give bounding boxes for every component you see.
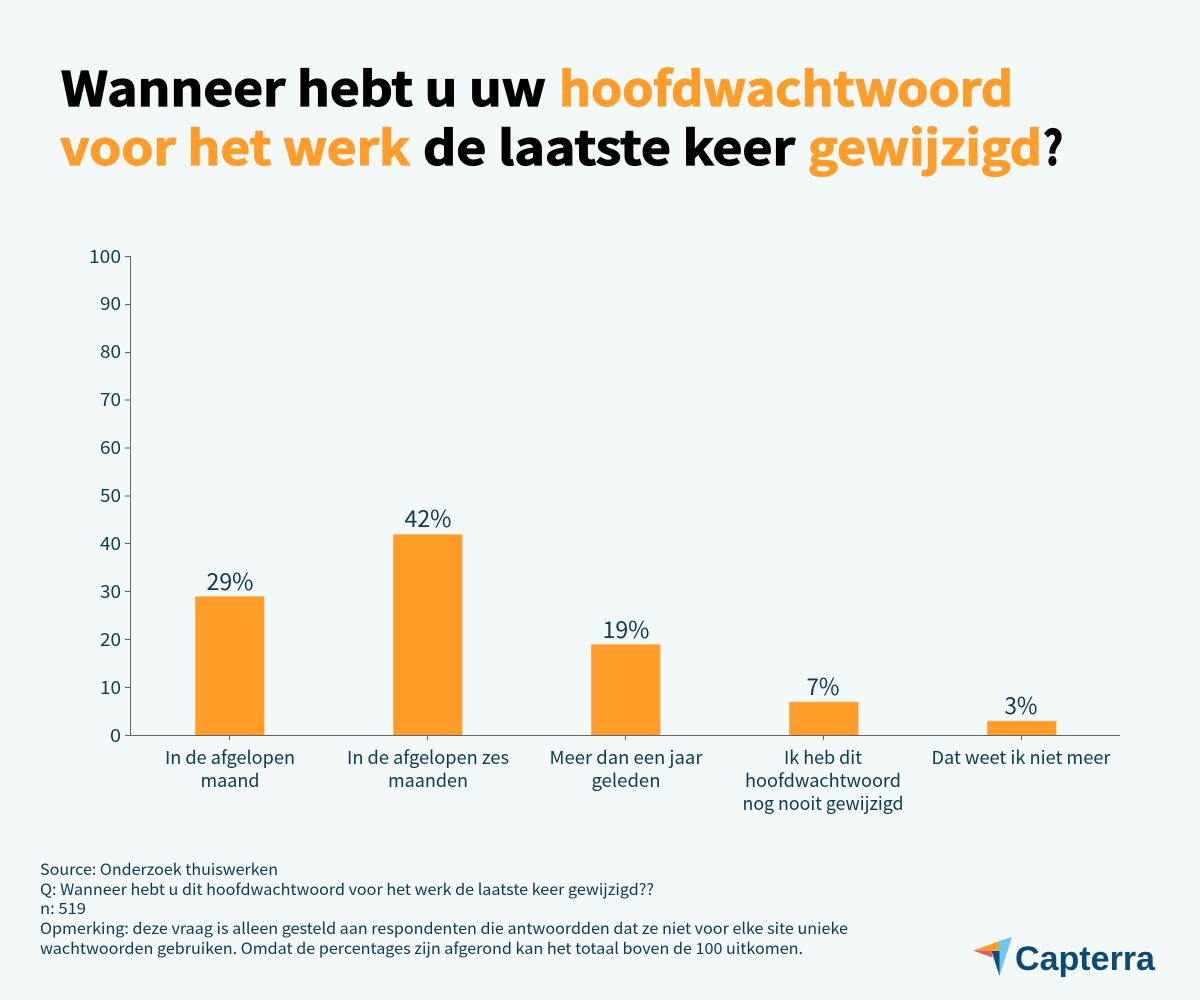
y axis: 40	[100, 530, 121, 556]
y axis: 60	[100, 434, 121, 460]
title: Wanneer hebt u uw	[61, 51, 546, 120]
category labels: Ik heb dit	[784, 744, 862, 770]
category labels: maand	[200, 767, 260, 793]
value labels: 42%	[404, 500, 452, 534]
y axis: 20	[100, 626, 121, 652]
x axis	[130, 736, 1120, 740]
source notes: Opmerking: deze vraag is alleen gesteld aan respondenten die antwoordden dat ze niet voor elke site unieke	[40, 917, 848, 939]
y axis: 100	[89, 243, 121, 269]
source notes: wachtwoorden gebruiken. Omdat de percentages zijn afgerond kan het totaal boven de 100 uitkomen.	[40, 937, 803, 959]
category labels	[165, 744, 1112, 816]
bars	[195, 534, 1056, 736]
source notes: Source: Onderzoek thuiswerken	[40, 858, 278, 880]
category labels: Dat weet ik niet meer	[932, 744, 1112, 770]
title: voor het werk	[60, 110, 411, 179]
category labels: maanden	[388, 767, 468, 793]
title: de laatste keer	[423, 110, 796, 179]
title: gewijzigd	[808, 110, 1042, 179]
title	[60, 51, 1063, 179]
value labels: 3%	[1004, 687, 1038, 721]
y axis: 0	[110, 722, 121, 748]
category labels: nog nooit gewijzigd	[742, 790, 904, 816]
title: hoofdwachtwoord	[559, 51, 1013, 120]
category labels: hoofdwachtwoord	[745, 767, 901, 793]
y axis: 50	[100, 482, 121, 508]
bar chart	[89, 243, 1120, 816]
y axis: 30	[100, 578, 121, 604]
y axis	[89, 243, 130, 748]
logo wordmark: Capterra	[1015, 940, 1156, 978]
logo: Capterra	[973, 937, 1156, 978]
y axis: 80	[100, 338, 121, 364]
category labels: Meer dan een jaar	[550, 744, 704, 770]
source notes	[40, 858, 848, 959]
value labels: 19%	[602, 611, 650, 645]
value labels	[206, 500, 1038, 721]
icon: Capterra arrow	[973, 937, 1012, 976]
title: ?	[1043, 110, 1063, 179]
y axis: 70	[100, 386, 121, 412]
category labels: In de afgelopen	[165, 744, 295, 770]
category labels: geleden	[592, 767, 660, 793]
value labels: 7%	[806, 668, 840, 702]
y axis: 90	[100, 290, 121, 316]
y axis: 10	[100, 674, 121, 700]
source notes: n: 519	[40, 897, 86, 919]
category labels: In de afgelopen zes	[347, 744, 509, 770]
value labels: 29%	[206, 563, 254, 597]
source notes: Q: Wanneer hebt u dit hoofdwachtwoord voor het werk de laatste keer gewijzigd??	[40, 878, 654, 900]
